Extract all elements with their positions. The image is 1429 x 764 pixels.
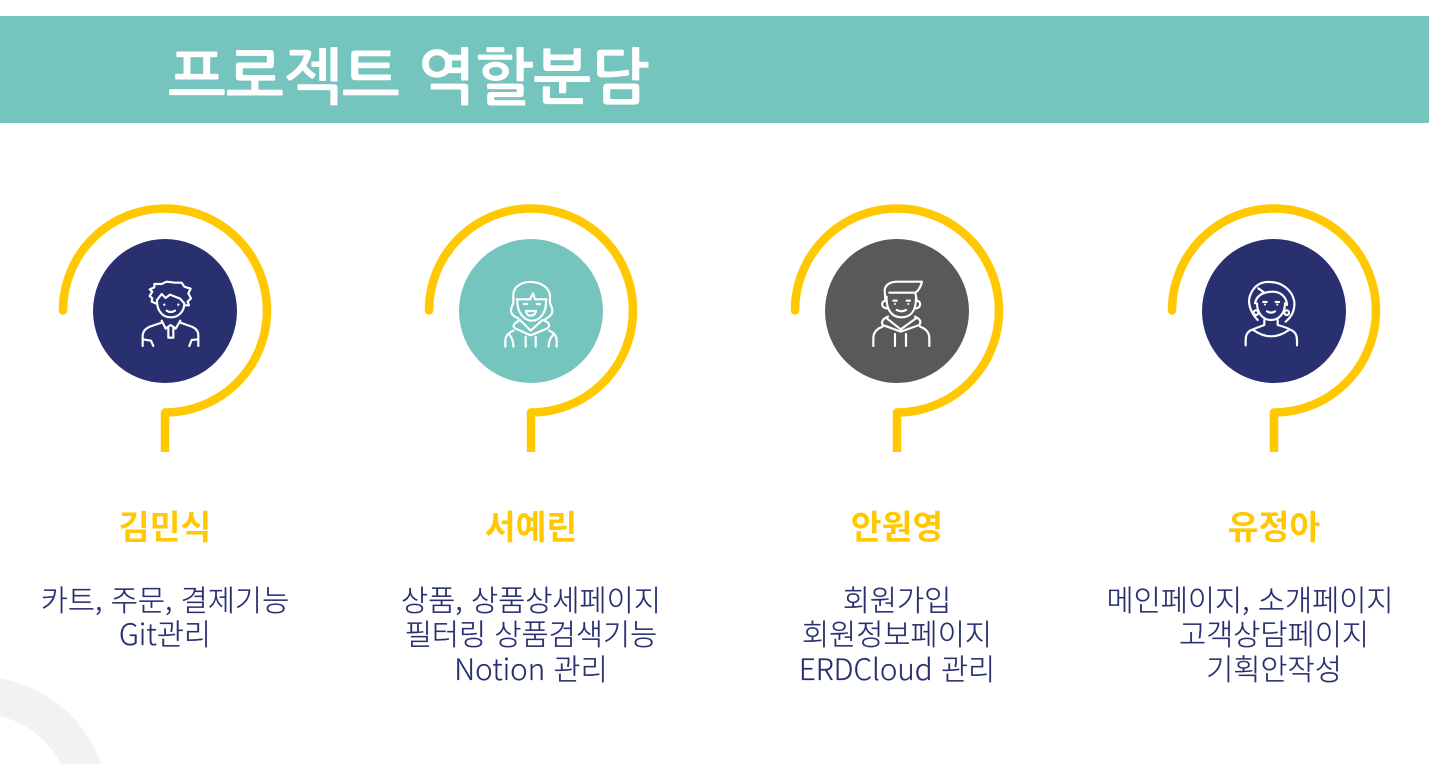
roles: 안원영 bbox=[799, 578, 995, 688]
name: 서예린: 서예린 bbox=[485, 500, 577, 549]
roles: 서예린: 필터링 상품검색기능 bbox=[405, 612, 657, 654]
avatar circle bbox=[1202, 239, 1346, 383]
roles: 유정아: 메인페이지, 소개페이지 bbox=[1106, 578, 1394, 620]
member 4 graphic bbox=[1168, 209, 1376, 452]
roles: 안원영: 회원가입 bbox=[843, 578, 951, 620]
arc bbox=[795, 209, 999, 452]
roles: 김민식: 카트, 주문, 결제기능 bbox=[41, 578, 289, 620]
arc bbox=[1172, 209, 1376, 452]
member 2 graphic bbox=[425, 209, 633, 452]
roles: 유정아 bbox=[1106, 578, 1394, 688]
name: 유정아: 유정아 bbox=[1228, 500, 1320, 549]
icon: man with swept hair bbox=[873, 282, 929, 346]
member 3 graphic bbox=[791, 209, 999, 452]
icon: long-haired woman bbox=[505, 282, 557, 347]
roles: 안원영: ERDCloud 관리 bbox=[799, 646, 995, 688]
roles: 안원영: 회원정보페이지 bbox=[802, 612, 992, 654]
roles: 김민식: Git관리 bbox=[119, 612, 211, 654]
roles: 서예린 bbox=[401, 578, 661, 688]
name: 김민식: 김민식 bbox=[119, 500, 211, 549]
avatar circle bbox=[825, 239, 969, 383]
roles: 유정아: 고객상담페이지 bbox=[1179, 612, 1369, 654]
arc bbox=[63, 209, 267, 452]
header band bbox=[0, 16, 1429, 123]
icon: woman with earrings bbox=[1246, 282, 1297, 345]
arc bbox=[429, 209, 633, 452]
title: 프로젝트 역할분담 bbox=[168, 48, 649, 109]
name: 안원영: 안원영 bbox=[851, 500, 943, 549]
decorative ring bbox=[0, 678, 101, 764]
roles: 서예린: Notion 관리 bbox=[454, 646, 608, 688]
roles: 김민식 bbox=[41, 578, 289, 654]
icon: curly-haired man bbox=[143, 282, 198, 346]
member 1 graphic bbox=[59, 209, 267, 452]
roles: 유정아: 기획안작성 bbox=[1206, 646, 1342, 688]
roles: 서예린: 상품, 상품상세페이지 bbox=[401, 578, 661, 620]
avatar circle bbox=[459, 239, 603, 383]
avatar circle bbox=[93, 239, 237, 383]
